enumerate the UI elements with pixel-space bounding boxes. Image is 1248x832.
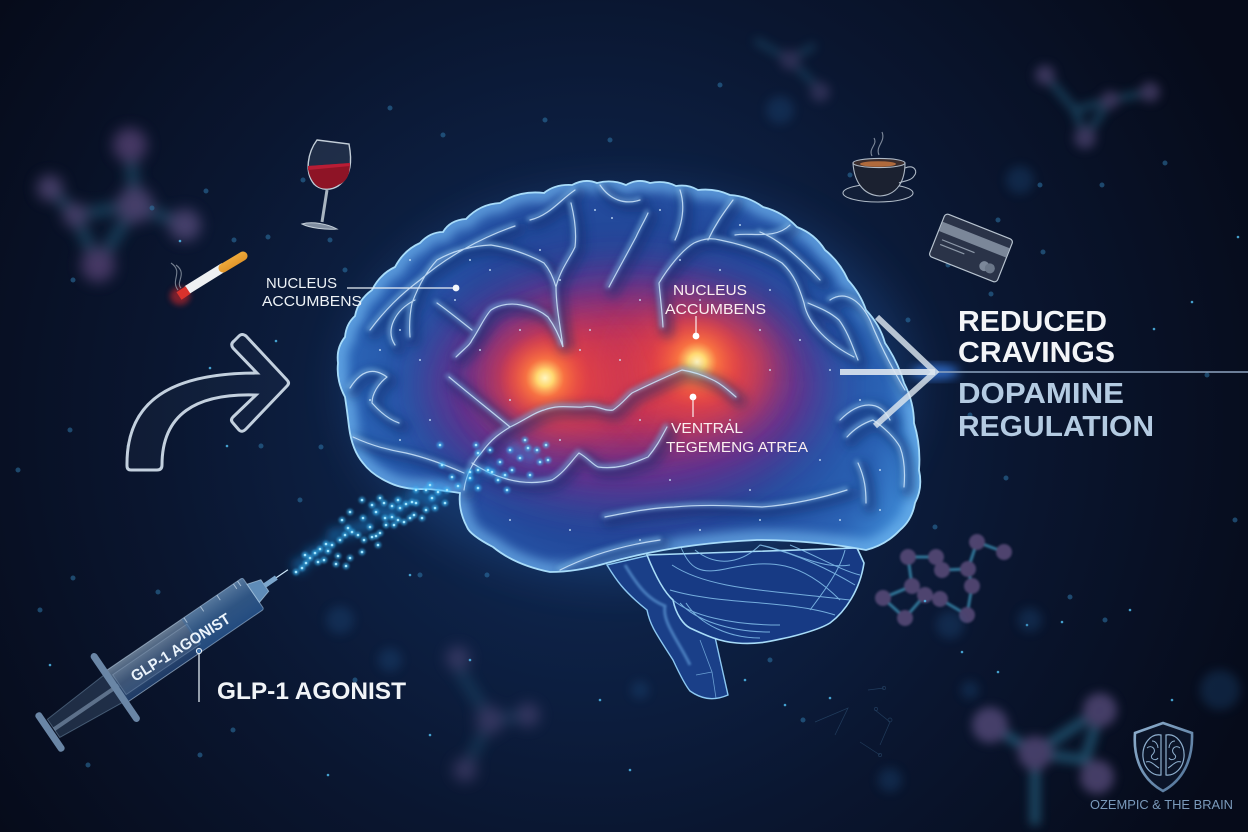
outcome: reduced cravings: CRAVINGS [958,337,1115,369]
finger flange [89,652,141,723]
curved input arrow [127,334,288,470]
cerebellum [647,545,864,643]
brain stem [607,555,728,699]
label: nucleus accumbens left: ACCUMBENS [262,293,362,310]
bokeh glow particles [326,96,1240,792]
plunger cap [34,711,66,753]
sulci highlights [350,185,905,570]
icon: wine glass [302,140,351,229]
syringe barrel [105,578,264,703]
red activation glow [338,181,920,574]
outcome: reduced cravings: REDUCED [958,306,1107,338]
brain glow [345,190,915,580]
syringe [24,536,311,768]
label: nucleus accumbens left [262,275,459,310]
icon: credit card [929,213,1013,283]
blurred molecule: bottom centre [446,646,540,782]
syringe barrel label: GLP-1 AGONIST [128,610,234,685]
GLP-1 callout: GLP-1 AGONIST [217,678,406,705]
cerebrum [338,181,920,572]
output arrow [840,317,1248,426]
logo: ozempic and the brain: OZEMPIC & THE BRAIN [1090,798,1233,812]
label: ventral tegemeng atrea: TEGEMENG ATREA [666,439,808,456]
sulci shadows [354,189,909,574]
brain [338,181,920,699]
drug particle stream [296,440,548,572]
blurred molecule: top right [1035,65,1160,149]
icon: coffee cup [843,132,916,202]
blurred molecule: top centre [755,40,830,102]
label: nucleus accumbens left: NUCLEUS [266,275,337,292]
outcome: dopamine regulation: DOPAMINE [958,378,1124,410]
brain sparkle dots [370,210,880,540]
hub and needle [247,576,271,602]
outcome: dopamine regulation [958,378,1154,443]
brain outline [338,181,920,572]
gyri soft highlights [349,184,904,569]
label: ventral tegemeng atrea: VENTRAL [671,420,743,437]
label: ventral tegemeng atrea [666,394,808,456]
inner rim light [338,181,920,572]
molecule: right [875,534,1012,626]
label: nucleus accumbens centre: NUCLEUS [673,282,747,299]
plunger rod [45,672,127,743]
label: nucleus accumbens centre [665,282,766,339]
blurred molecule: bottom right [972,693,1117,825]
outcome: dopamine regulation: REGULATION [958,411,1154,443]
faint constellation molecule [815,686,892,757]
blurred molecule: top left [37,128,201,282]
label: nucleus accumbens centre: ACCUMBENS [665,301,766,318]
icon: cigarette [170,256,243,305]
GLP-1 callout [196,648,406,705]
logo: ozempic and the brain [1090,723,1233,812]
outcome: reduced cravings [958,306,1115,369]
